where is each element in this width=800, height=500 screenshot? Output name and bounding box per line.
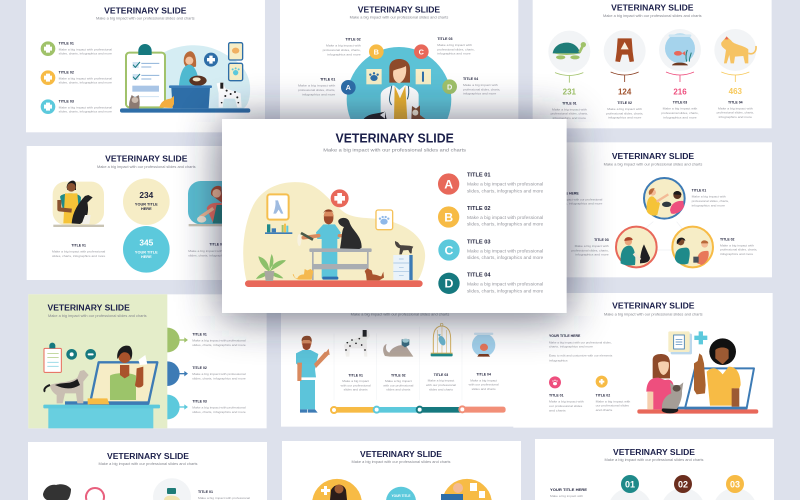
list item A	[438, 173, 544, 195]
list item D: Make a big impact with professional	[467, 282, 543, 287]
caption: title 02	[188, 243, 242, 257]
label: title 01: Make a big impact with professional	[198, 496, 250, 500]
column: dalmatian, title 01: Make a big impact	[342, 379, 369, 383]
marker D	[442, 79, 457, 94]
column: fishbowl, title 04: Make a big impact	[470, 378, 497, 382]
step 01	[610, 475, 650, 500]
subtitle: Make a big impact with our professional slides and charts	[96, 17, 195, 21]
column: brown pet 124: professional slides, charts,	[606, 111, 644, 115]
text block: your title here: charts, infographics and more	[549, 345, 593, 349]
list item 2: slides, charts, infographics and more	[59, 80, 112, 84]
column: dalmatian, title 01: TITLE 01	[348, 373, 363, 377]
list item 3	[41, 99, 112, 114]
column: brown pet 124: Make a big impact with	[607, 107, 643, 111]
floor	[245, 280, 423, 287]
subtitle: Make a big impact with our professional slides and charts	[323, 147, 467, 153]
list item 1	[41, 41, 112, 56]
label: title 02: TITLE 02	[345, 38, 361, 42]
column dividers	[334, 327, 462, 400]
panel: lower-left slide	[28, 442, 267, 500]
caption: title 02: Make a big impact with professional	[188, 249, 242, 253]
list item 1: Make a big impact with professional	[192, 339, 246, 343]
item: title 02: our professional slides	[596, 404, 630, 408]
list item 2	[167, 361, 246, 386]
column: fishbowl 216	[659, 29, 701, 119]
timeline	[331, 406, 506, 413]
table	[309, 248, 372, 280]
list item D: slides, charts, infographics and more	[467, 288, 544, 293]
illustration: veterinarian in circle	[347, 47, 451, 152]
brown dog	[365, 268, 384, 280]
column: turtle 231	[548, 31, 590, 120]
label: title 01: TITLE 01	[198, 490, 213, 494]
step 01: 01	[625, 480, 635, 490]
label: title 01	[298, 78, 336, 96]
list item 2: TITLE 02	[192, 366, 207, 370]
column: cat, title 02: with our professional	[383, 383, 414, 387]
panel: top-center slide	[280, 0, 518, 152]
stat circle 345: YOUR TITLE	[135, 250, 158, 254]
label: title 03: professional slides, charts,	[437, 47, 475, 51]
label: title 03	[437, 37, 475, 56]
heading: VETERINARY SLIDE	[335, 132, 454, 146]
list item 3: slides, charts, infographics and more	[59, 109, 112, 113]
label: your title here: YOUR TITLE HERE	[547, 191, 579, 195]
list item 1: TITLE 01	[192, 333, 207, 337]
item: title 02: Make a big impact with	[596, 399, 631, 403]
list item A: Make a big impact with professional	[467, 182, 543, 187]
list item 1: slides, charts, infographics and more	[192, 343, 246, 347]
heading: VETERINARY SLIDE	[104, 7, 187, 16]
label: title 02: infographics and more	[720, 252, 754, 256]
heading: VETERINARY SLIDE	[47, 304, 131, 313]
heading: VETERINARY SLIDE	[360, 450, 443, 459]
panel: lower-right slide	[535, 439, 774, 500]
circle: title 03	[616, 227, 657, 267]
subtitle: Make a big impact with our professional slides and charts	[604, 458, 704, 462]
subtitle: Make a big impact with our professional slides and charts	[97, 165, 196, 169]
illustration: online vet with owner and cat	[637, 331, 758, 414]
background blob	[243, 182, 425, 282]
illustration: vet clinic	[120, 43, 250, 113]
label: title 01: TITLE 01	[692, 189, 706, 193]
label: title 02: professional slides, charts,	[323, 48, 361, 52]
illustration: groomer with puppy	[188, 181, 239, 226]
panel: top-left slide	[26, 0, 265, 132]
plant	[256, 254, 286, 281]
illustration: circle left	[312, 479, 362, 500]
caption: title 02: slides, charts, infographics and more	[188, 253, 242, 257]
column: turtle 231: professional slides, charts,	[551, 112, 588, 116]
paw picture frame	[376, 210, 393, 230]
list item B: TITLE 02	[467, 206, 491, 212]
list item B	[438, 206, 544, 228]
marker C: C	[419, 47, 425, 56]
subtitle: Make a big impact with our professional slides and charts	[350, 15, 449, 19]
list item A: slides, charts, infographics and more	[467, 188, 544, 193]
label: title 03: Make a big impact with	[575, 244, 609, 248]
column: orange cat 463: Make a big impact with	[718, 106, 753, 110]
label: title 03: professional slides, charts,	[571, 248, 609, 252]
column: birdcage, title 03: with our professional	[426, 383, 456, 387]
illustration: veterinarian examining dog	[243, 182, 425, 287]
label: title 02: professional slides, charts,	[720, 248, 758, 252]
label: title 03: Make a big impact with	[437, 43, 472, 47]
stat circle 234: HERE	[141, 207, 152, 211]
shelf with books	[265, 224, 292, 234]
item: title 02	[596, 376, 631, 412]
green side panel	[28, 294, 167, 428]
cat on cabinet	[395, 241, 413, 254]
list item 1: Make a big impact with professional	[59, 47, 112, 51]
illustration: black pet	[43, 484, 71, 500]
list item 3	[167, 395, 246, 419]
column: dalmatian, title 01	[341, 330, 371, 392]
column: dalmatian, title 01: slides and charts	[344, 388, 368, 392]
stat circle 345	[123, 226, 170, 273]
column: orange cat 463: professional slides, charts,	[717, 111, 754, 115]
column: orange cat 463: 463	[729, 87, 743, 96]
caption: title 01: TITLE 01	[71, 243, 86, 247]
subtitle: Make a big impact with our professional slides and charts	[351, 312, 450, 316]
heading: VETERINARY SLIDE	[612, 302, 695, 311]
label: your title here	[547, 191, 603, 206]
label: title 03	[571, 238, 609, 257]
list item 3: TITLE 03	[59, 99, 74, 103]
panel: middle-left slide	[27, 146, 265, 280]
label: title 01: Make a big impact with	[692, 195, 726, 199]
list item D: D	[445, 277, 454, 291]
subtitle: Make a big impact with our professional slides and charts	[604, 163, 703, 167]
column: birdcage, title 03	[426, 323, 456, 391]
column: fishbowl 216: professional slides, charts,	[661, 111, 699, 115]
orange cat	[293, 269, 313, 280]
heading: VETERINARY SLIDE	[358, 5, 441, 14]
item: title 01	[549, 376, 584, 412]
list item C	[438, 239, 544, 261]
circle: title 02	[672, 227, 713, 267]
list item 2: slides, charts, infographics and more	[192, 376, 246, 380]
label: title 03: infographics and more	[575, 253, 609, 257]
illustration: grey circle with figure	[153, 478, 191, 500]
column: fishbowl 216: TITLE 03	[673, 101, 687, 105]
label: title 02: Make a big impact with	[720, 243, 754, 247]
center slide drop shadow	[222, 122, 567, 316]
panel: middle-right slide	[527, 142, 772, 277]
label: title 02: infographics and more	[327, 52, 361, 56]
marker C	[414, 44, 429, 59]
panel: bottom-center slide	[281, 293, 520, 427]
list item D: TITLE 04	[467, 273, 491, 279]
list item C: C	[445, 243, 454, 257]
list item C: slides, charts, infographics and more	[467, 255, 544, 260]
caption: title 02: TITLE 02	[209, 243, 224, 247]
column: fishbowl 216: Make a big impact with	[663, 107, 698, 111]
marker B: B	[374, 47, 379, 56]
list item C: TITLE 03	[467, 239, 491, 245]
step 02: 02	[678, 480, 688, 490]
label: title 04: infographics and more	[463, 92, 497, 96]
column: cat, title 02: TITLE 02	[391, 373, 406, 377]
label: your title here: slides, charts, infographics and more	[547, 202, 603, 206]
column: turtle 231: infographics and more	[553, 116, 587, 120]
stat circle 345: HERE	[141, 255, 152, 259]
panel: bottom-left slide	[28, 294, 267, 428]
illustration: online vet consultation	[43, 343, 160, 428]
list item C: Make a big impact with professional	[467, 248, 543, 253]
text block: your title here: YOUR TITLE HERE	[550, 488, 588, 492]
column: birdcage, title 03: slides and charts	[429, 387, 454, 391]
column: cat, title 02: slides and charts	[386, 388, 411, 392]
column: brown pet 124: TITLE 02	[617, 101, 632, 105]
text block: your title here: infographics	[549, 358, 568, 362]
list item 3: Make a big impact with professional	[192, 406, 246, 410]
list item 1: slides, charts, infographics and more	[59, 51, 112, 55]
stat circle 234: 234	[139, 190, 154, 200]
step 03: 03	[730, 480, 740, 490]
marker A: A	[346, 83, 352, 92]
label: title 03: TITLE 03	[594, 238, 609, 242]
list item 3: slides, charts, infographics and more	[192, 410, 246, 414]
text block: your title here: Make a big impact with	[550, 494, 584, 498]
list item B: Make a big impact with professional	[467, 215, 543, 220]
list item A: TITLE 01	[467, 173, 491, 179]
list item B: slides, charts, infographics and more	[467, 222, 544, 227]
marker D: D	[447, 82, 452, 91]
list item 2: Make a big impact with professional	[192, 372, 246, 376]
label: title 01: TITLE 01	[320, 78, 335, 82]
label: title 03: TITLE 03	[437, 37, 453, 41]
list item 2: TITLE 02	[59, 70, 74, 74]
text block: your title here: Make a big impact with our professional slides,	[549, 340, 612, 344]
list item 1	[167, 328, 246, 352]
column: orange cat 463: infographics and more	[719, 115, 752, 119]
item: title 02: and charts	[596, 408, 613, 412]
item: title 01: and charts	[549, 408, 566, 412]
label: title 04: professional slides, charts,	[463, 87, 501, 91]
column: fishbowl, title 04: with our professional	[469, 383, 499, 387]
circle: title 01	[644, 178, 685, 219]
text block: your title here: YOUR TITLE HERE	[549, 334, 581, 338]
panel: lower-center slide	[282, 441, 521, 500]
label: title 01: professional slides, charts,	[692, 199, 729, 203]
column: fishbowl, title 04	[469, 333, 499, 391]
heading: VETERINARY SLIDE	[611, 4, 694, 13]
column: fishbowl, title 04: slides and charts	[472, 387, 496, 391]
list item B: B	[444, 210, 453, 224]
black dog	[338, 218, 362, 249]
marker B	[369, 44, 384, 59]
stat circle 345: 345	[139, 238, 154, 248]
icon: red ring with paw	[86, 488, 104, 500]
caption: title 01: slides, charts, infographics and more	[52, 254, 106, 258]
veterinarian	[297, 209, 344, 280]
label: title 02	[720, 237, 758, 256]
column: birdcage, title 03: Make a big impact	[428, 379, 455, 383]
illustration: groomer with black dog	[53, 181, 104, 227]
icon: medical cross	[331, 189, 349, 207]
illustration: veterinarian pointing	[296, 336, 330, 413]
column: brown pet 124: 124	[618, 88, 632, 97]
list item D	[438, 273, 544, 294]
list item 2: Make a big impact with professional	[59, 76, 112, 80]
stat circle	[386, 487, 416, 500]
label: title 01: infographics and more	[302, 92, 336, 96]
list item 1: TITLE 01	[59, 42, 74, 46]
list item 3: TITLE 03	[192, 400, 207, 404]
column: brown pet 124	[604, 30, 646, 120]
illustration: circle right	[441, 479, 492, 500]
label: title 02: Make a big impact with	[326, 44, 361, 48]
label: title 01: Make a big impact with	[298, 84, 336, 88]
column: turtle 231: 231	[563, 88, 577, 97]
item: title 01: TITLE 01	[549, 394, 564, 398]
column: fishbowl 216: 216	[673, 87, 687, 96]
column: cat, title 02: Make a big impact	[385, 379, 412, 383]
column: orange cat 463: TITLE 04	[728, 100, 743, 104]
column: brown pet 124: infographics and more	[608, 116, 642, 120]
list item A: A	[444, 177, 453, 191]
subtitle: Make a big impact with our professional slides and charts	[603, 14, 702, 18]
text block: your title here	[549, 334, 613, 362]
panel: main center slide	[222, 119, 567, 313]
label: title 02	[323, 38, 361, 56]
column: turtle 231: Make a big impact with	[552, 107, 587, 111]
label: title 03: infographics and more	[437, 52, 471, 56]
panel: top-right slide	[533, 0, 772, 128]
column: birdcage, title 03: TITLE 03	[434, 373, 448, 377]
list item 2	[41, 70, 112, 85]
subtitle: Make a big impact with our professional slides and charts	[98, 462, 198, 466]
column: turtle 231: TITLE 01	[562, 101, 577, 105]
dog picture frame	[267, 194, 289, 220]
column: dalmatian, title 01: with our professional	[341, 383, 371, 387]
label: title 01: professional slides, charts,	[298, 88, 336, 92]
step 02	[663, 475, 703, 500]
column: fishbowl 216: infographics and more	[663, 115, 697, 119]
panel: bottom-right slide	[513, 293, 773, 428]
marker A	[341, 80, 356, 95]
label: title 04: Make a big impact with	[463, 83, 498, 87]
stat circle 234: YOUR TITLE	[135, 202, 158, 206]
caption: title 01: Make a big impact with professional	[52, 250, 106, 254]
label: title 04: TITLE 04	[463, 77, 479, 81]
column: fishbowl, title 04: TITLE 04	[476, 373, 491, 377]
column: orange cat 463	[714, 29, 756, 119]
heading: VETERINARY SLIDE	[612, 152, 695, 161]
item: title 01: our professional slides	[549, 404, 583, 408]
label: title 01	[692, 189, 729, 207]
caption: title 01	[52, 243, 106, 258]
stat circle: YOUR TITLE	[392, 494, 410, 498]
text block: your title here: Easy to edit and customize with our elements	[549, 354, 613, 358]
stat circle 234	[123, 178, 170, 225]
label: title 01: infographics and more	[692, 203, 725, 207]
cabinet	[393, 255, 413, 280]
item: title 01: Make a big impact with	[549, 400, 584, 404]
label: title 04	[463, 77, 501, 96]
label: title 01	[198, 490, 250, 500]
heading: VETERINARY SLIDE	[107, 452, 190, 461]
label: title 02: TITLE 02	[720, 237, 735, 241]
connector lines	[643, 222, 683, 250]
heading: VETERINARY SLIDE	[105, 155, 188, 164]
label: your title here: Make a big impact with our professional	[547, 197, 603, 201]
subtitle: Make a big impact with our professional slides and charts	[48, 314, 147, 318]
subtitle: Make a big impact with our professional slides and charts	[604, 313, 703, 317]
step 03	[715, 475, 755, 500]
item: title 02: TITLE 02	[596, 393, 610, 397]
list item 3: Make a big impact with professional	[59, 105, 112, 109]
heading: VETERINARY SLIDE	[613, 448, 696, 457]
column: cat, title 02	[383, 339, 414, 392]
subtitle: Make a big impact with our professional slides and charts	[352, 460, 451, 464]
text block: your title here	[550, 488, 588, 498]
